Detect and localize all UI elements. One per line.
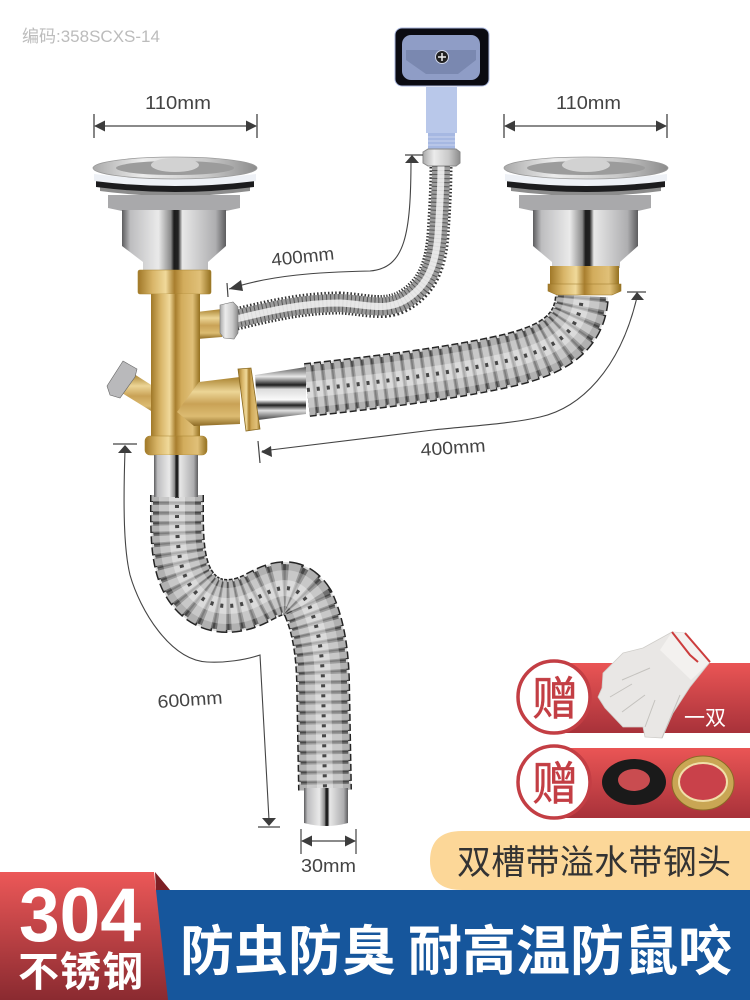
side outlet: [197, 309, 222, 339]
product code: 编码:358SCXS-14: [22, 27, 160, 46]
dimension: 30mm: 30mm: [301, 856, 356, 876]
large hose: [307, 296, 582, 390]
drain tail pipe: [304, 788, 348, 826]
material badge: [0, 872, 170, 1000]
feature pill: 双槽带溢水带钢头: [457, 844, 731, 882]
brass tee: [107, 270, 306, 497]
outlet pipe: [154, 455, 198, 497]
gold ring: [672, 756, 734, 810]
dimension: overflow hose 400mm: [227, 155, 423, 297]
branch flange: [238, 368, 260, 431]
left strainer: [93, 157, 257, 272]
gift: rings: [518, 746, 750, 818]
gift badge: 赠: [532, 673, 578, 725]
right brass nut: [548, 266, 621, 295]
dimension: large hose 400mm: [258, 292, 646, 463]
connector pipe: [255, 367, 306, 420]
material badge: 304: [19, 873, 141, 958]
overflow hose nut: [423, 149, 460, 166]
dimension: 30mm: [301, 829, 356, 876]
main tube: [151, 294, 200, 440]
overflow head: [395, 28, 489, 150]
gloves: [598, 632, 710, 738]
left cup: [122, 210, 226, 272]
gift badge: [518, 661, 590, 733]
upper nut: [138, 270, 211, 294]
feature pill: [430, 831, 750, 890]
gift: gloves: [518, 632, 750, 738]
quantity label: 一双: [684, 707, 726, 730]
feature text left: 防虫防臭: [180, 922, 396, 982]
angled outlet: [122, 374, 156, 414]
material badge: 不锈钢: [18, 949, 143, 995]
bottom banner: [155, 890, 750, 1000]
dimension: overflow hose 400mm: 400mm: [270, 244, 335, 270]
right flange: [504, 157, 668, 196]
left collar: [108, 195, 240, 211]
gift badge: 赠: [532, 758, 578, 810]
ribbon: [555, 748, 750, 818]
right collar: [519, 195, 651, 211]
overflow stem: [426, 87, 457, 150]
dimension: left 110mm: 110mm: [145, 93, 211, 113]
overflow hose: [232, 165, 441, 320]
dimension: drain 600mm: 600mm: [157, 688, 223, 712]
angled hex nut: [107, 361, 137, 398]
gift badge: [518, 746, 590, 818]
dimension: right 110mm: [504, 93, 667, 138]
left flange: [93, 157, 257, 196]
lower collar: [145, 436, 207, 455]
side hex nut: [220, 302, 238, 339]
overflow box: [395, 28, 489, 86]
branch: [177, 377, 240, 426]
dimension: right 110mm: 110mm: [556, 93, 621, 113]
right strainer: [504, 157, 668, 295]
black ring: [602, 759, 666, 805]
dimension: large hose 400mm: 400mm: [420, 436, 486, 460]
dimension: left 110mm: [94, 93, 257, 138]
dimension: drain 600mm: [113, 444, 280, 827]
feature text right: 耐高温防鼠咬: [408, 922, 732, 982]
drain hose: [177, 495, 325, 790]
ribbon: [555, 663, 750, 733]
right cup: [533, 210, 638, 268]
